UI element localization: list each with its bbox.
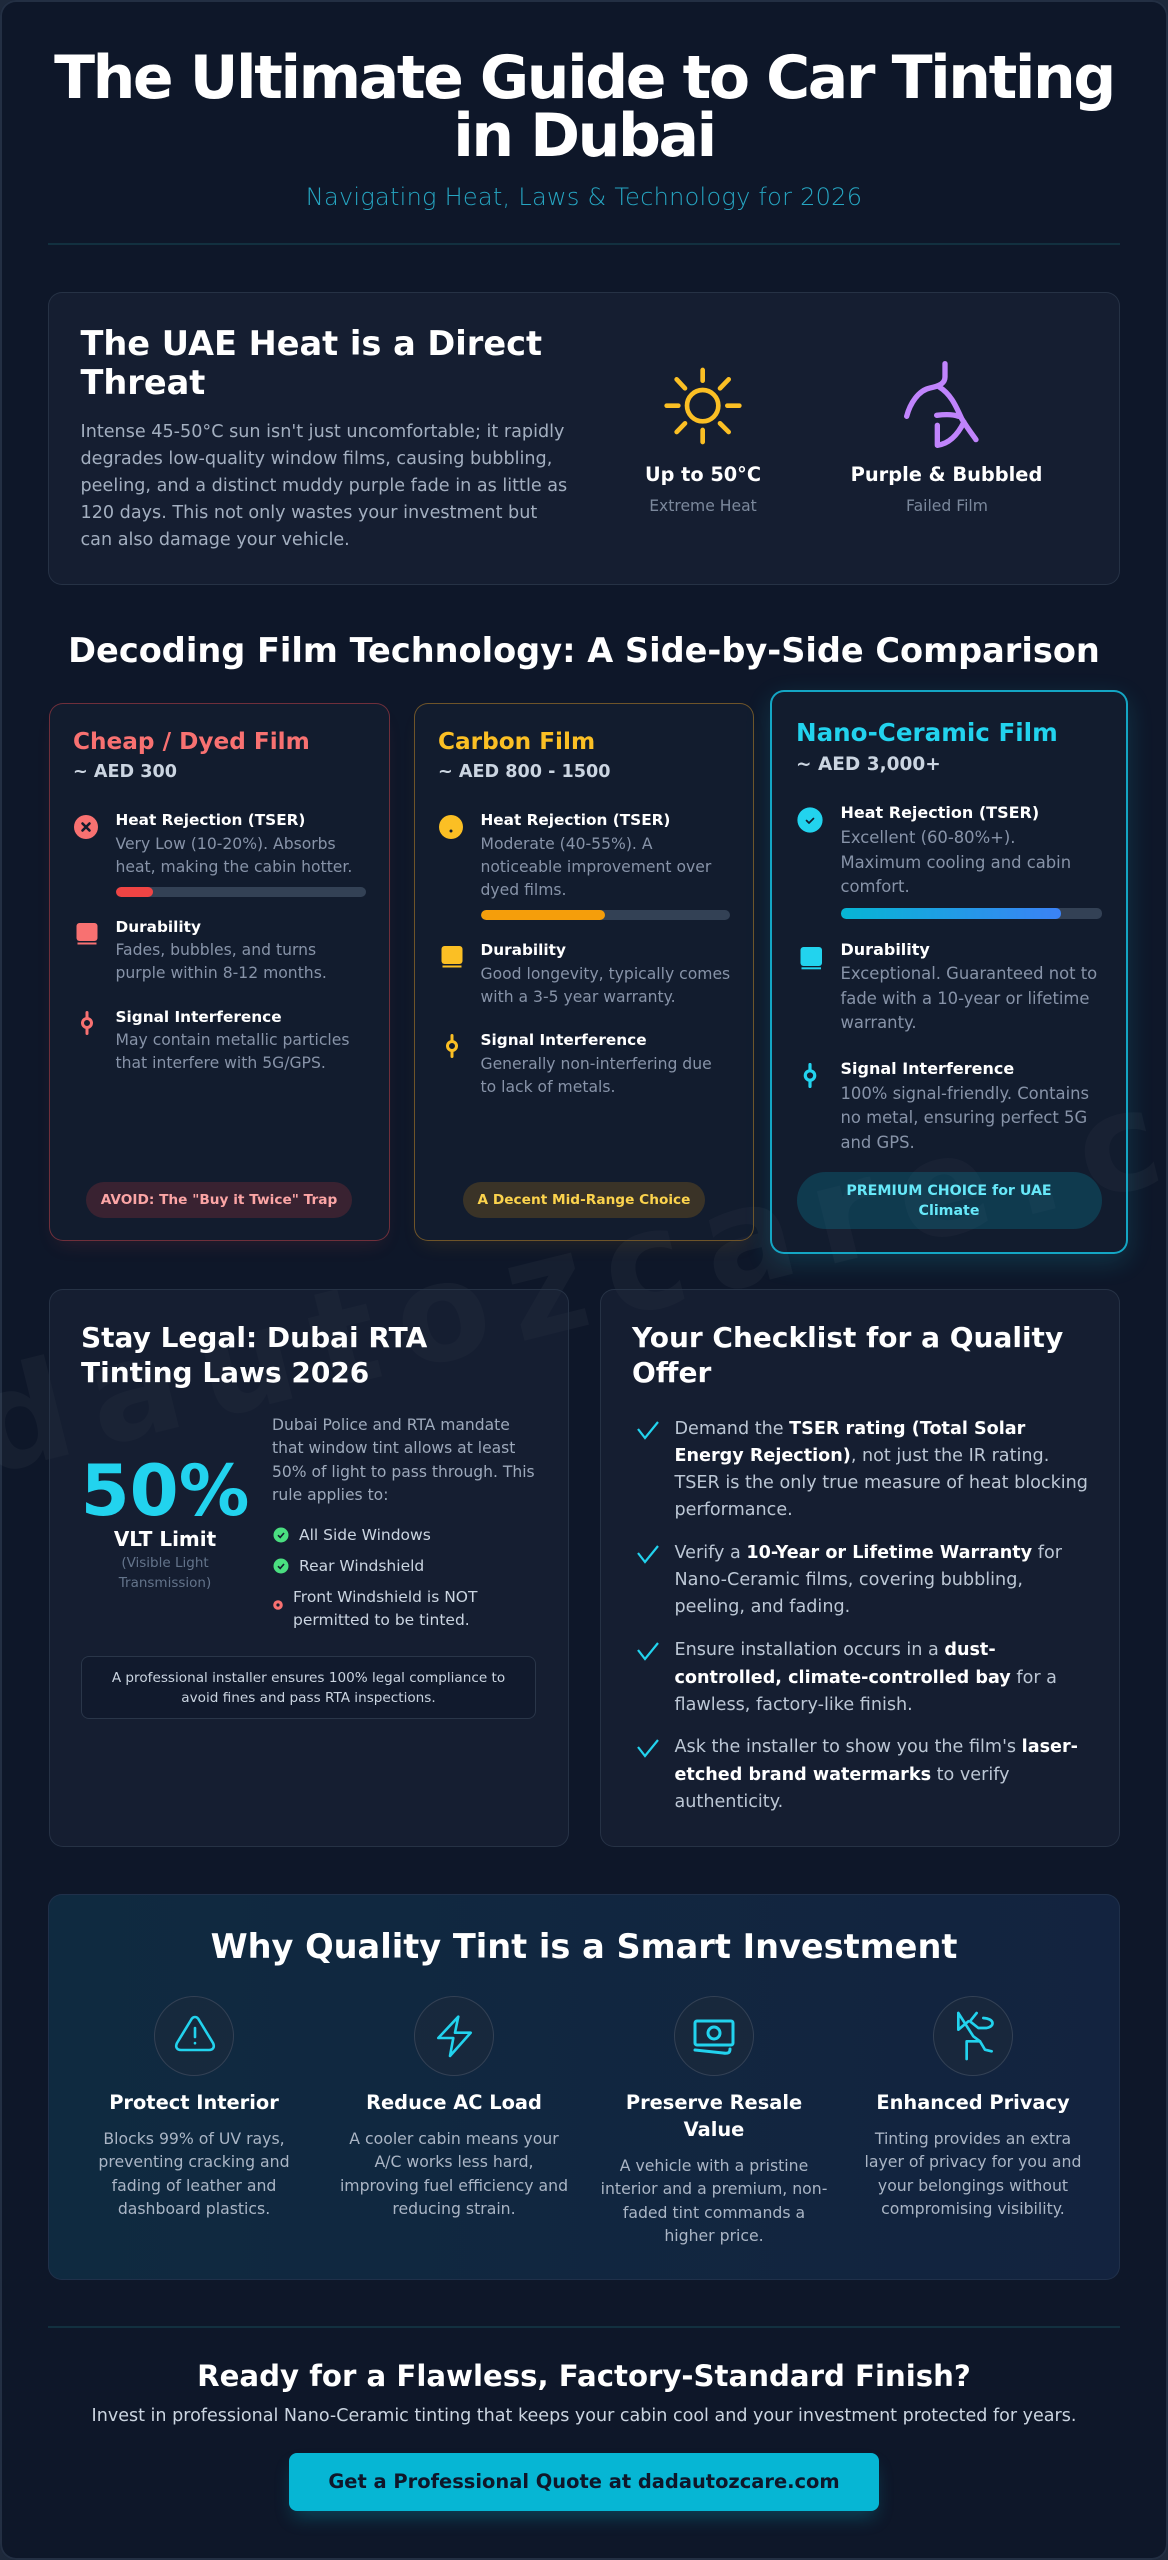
footer divider — [48, 2326, 1120, 2328]
panel: checklist — [600, 1289, 1120, 1847]
item text: durability: purple within 8-12 months. — [116, 964, 327, 982]
body text: mandate: 50% of light to pass through. This — [272, 1463, 535, 1481]
benefit text: layer of privacy for you and — [865, 2152, 1081, 2171]
checklist item 2: peeling, and fading. — [674, 1597, 850, 1617]
title: The Ultimate Guide to Car Tinting — [54, 43, 1114, 113]
item text: signal: May contain metallic particles — [116, 1031, 349, 1049]
benefit text: faded tint commands a — [623, 2203, 805, 2222]
benefit text: dashboard plastics. — [118, 2199, 270, 2218]
heading: checklist: Your Checklist for a Quality — [632, 1321, 1063, 1354]
item text: heat rejection: Maximum cooling and cabin — [840, 852, 1071, 872]
icon: warning red — [273, 1600, 283, 1610]
card price: ~ AED 3,000+ — [796, 754, 941, 774]
benefit text: A vehicle with a pristine — [620, 2156, 808, 2175]
checklist item 3 — [674, 1637, 1057, 1719]
item text: signal: no metal, ensuring perfect 5G — [840, 1108, 1087, 1127]
heading: UAE heat: Threat — [80, 362, 205, 402]
title — [54, 43, 1114, 171]
item title: signal: Signal Interference — [840, 1059, 1014, 1078]
item title: durability: Durability — [116, 918, 201, 936]
checklist item 3: flawless, factory-like finish. — [674, 1695, 913, 1715]
item text: durability — [480, 964, 730, 1006]
item text: signal: and GPS. — [840, 1133, 915, 1152]
item title: signal: Signal Interference — [116, 1008, 282, 1026]
benefit text — [865, 2127, 1081, 2220]
benefit text: improving fuel efficiency and — [340, 2176, 568, 2195]
benefit text: fading of leather and — [112, 2176, 276, 2195]
item text: signal: to lack of metals. — [480, 1078, 615, 1096]
icon: bolt — [414, 1996, 494, 2076]
icon: durability — [76, 923, 98, 944]
heading: legal: Stay Legal: Dubai RTA — [81, 1321, 427, 1354]
note box: installer: avoid fines and pass RTA inspections. — [181, 1690, 436, 1706]
body text: UAE heat: degrades low-quality window films, causing bubbling, — [80, 449, 552, 469]
body text: UAE heat: 120 days. This not only wastes your investment but — [80, 503, 537, 523]
icon: durability — [800, 947, 822, 970]
benefit text: Blocks 99% of UV rays, — [103, 2129, 285, 2148]
stat sublabel: extreme heat: Extreme Heat — [649, 497, 757, 515]
item title: durability: Durability — [480, 941, 566, 959]
benefit title — [626, 2088, 802, 2143]
section heading: comparison: Decoding Film Technology: A Side-by-Side Comparison — [68, 631, 1100, 670]
progress bar: 85 percent — [840, 908, 1102, 918]
checklist item 4: authenticity. — [674, 1792, 783, 1812]
card price: ~ AED 800 - 1500 — [438, 762, 610, 782]
badge: premium: Climate — [919, 1203, 979, 1219]
benefit text: interior and a premium, non- — [601, 2179, 827, 2198]
checklist item 2: Verify a 10-Year or Lifetime Warranty for — [674, 1543, 1062, 1563]
icon: check green — [274, 1528, 288, 1542]
body text: UAE heat: can also damage your vehicle. — [80, 530, 350, 550]
panel: nano-ceramic film — [770, 690, 1128, 1254]
heading: UAE heat: The UAE Heat is a Direct — [80, 324, 542, 363]
badge: mid range: A Decent Mid-Range Choice — [478, 1192, 690, 1208]
benefit: protect interior — [64, 1996, 324, 2226]
icon: signal — [446, 1034, 458, 1058]
progress bar: 15 percent — [116, 887, 366, 897]
item text: heat rejection: Excellent (60-80%+). — [840, 828, 1016, 847]
checklist item 1: Demand the TSER rating (Total Solar — [674, 1418, 1025, 1438]
stat sublabel: failed film: Failed Film — [906, 497, 988, 515]
card title: Cheap / Dyed Film — [73, 728, 310, 755]
progress bar: 50 percent — [480, 910, 730, 920]
subtitle: Navigating Heat, Laws & Technology for 2026 — [306, 183, 862, 211]
icon: privacy — [933, 1996, 1013, 2076]
checklist item 1: Energy Rejection), not just the IR rating. — [674, 1446, 1049, 1466]
item text: durability — [116, 941, 327, 982]
item text: signal: Generally non-interfering due — [480, 1054, 712, 1072]
body text: UAE heat: Intense 45-50°C sun isn't just uncomfortable; it rapidly — [80, 422, 564, 442]
heading: legal — [81, 1321, 428, 1388]
figure: VLT limit — [81, 1450, 249, 1591]
item text: durability: Good longevity, typically comes — [480, 964, 730, 982]
title: in Dubai — [453, 101, 715, 171]
benefit text: A/C works less hard, — [374, 2152, 534, 2171]
item text: durability: fade with a 10-year or lifetime — [840, 989, 1089, 1008]
icon: signal — [804, 1063, 816, 1088]
list item: side windows: All Side Windows — [299, 1526, 431, 1544]
benefit text — [601, 2154, 827, 2247]
benefit text: preventing cracking and — [98, 2152, 290, 2171]
privacy glyph — [950, 2008, 1003, 2063]
icon: heat check — [797, 807, 823, 833]
item text: durability: with a 3-5 year warranty. — [480, 988, 676, 1006]
stat label: purple and bubbled: Purple & Bubbled — [851, 463, 1042, 486]
checklist item 4 — [674, 1734, 1078, 1816]
checklist item 3: controlled, climate-controlled bay for a — [674, 1668, 1057, 1688]
benefit: preserve resale value — [584, 1996, 844, 2266]
benefit text — [98, 2127, 290, 2220]
bolt glyph — [434, 2014, 474, 2058]
note box: installer — [81, 1656, 536, 1719]
item text: durability: Fades, bubbles, and turns — [116, 941, 316, 959]
label: VLT limit: VLT Limit — [114, 1527, 216, 1551]
item title: durability: Durability — [840, 940, 930, 958]
stat: failed film — [851, 361, 1042, 515]
badge: premium — [796, 1172, 1102, 1229]
checklist item 4: etched brand watermarks to verify — [674, 1765, 1010, 1785]
heading: checklist — [632, 1321, 1063, 1388]
icon: signal — [81, 1011, 93, 1035]
icon: money — [674, 1996, 754, 2076]
benefit: reduce AC load — [324, 1996, 584, 2226]
checklist item 1: TSER is the only true measure of heat blocking — [674, 1473, 1088, 1493]
item text: heat rejection: heat, making the cabin hotter. — [116, 858, 352, 876]
icon: heat x — [74, 815, 98, 839]
list: allowed windows — [273, 1526, 478, 1629]
item text: durability: Exceptional. Guaranteed not to — [840, 964, 1097, 983]
body text: mandate: rule applies to: — [272, 1486, 388, 1504]
body text: mandate: Dubai Police and RTA mandate — [272, 1416, 510, 1434]
CTA button: Get a Professional Quote at dadautozcare.com — [328, 2470, 840, 2493]
benefit text: your belongings without — [878, 2176, 1068, 2195]
item title: heat rejection: Heat Rejection (TSER) — [480, 811, 670, 829]
checklist item 3: Ensure installation occurs in a dust- — [674, 1640, 996, 1660]
card price: ~ AED 300 — [73, 762, 177, 782]
header divider — [48, 243, 1120, 245]
benefit: enhanced privacy — [844, 1996, 1104, 2226]
checklist item 2 — [674, 1543, 1062, 1617]
item text: heat rejection: Moderate (40-55%). A — [480, 834, 652, 852]
icon: check green — [274, 1558, 288, 1574]
badge: mid range — [463, 1182, 705, 1218]
warning glyph — [174, 2014, 216, 2054]
benefit title: Enhanced Privacy — [876, 2090, 1070, 2114]
body text: mandate — [272, 1416, 535, 1504]
note: visible light transmission — [118, 1555, 211, 1591]
icon: check — [636, 1738, 660, 1760]
benefit text: A cooler cabin means your — [349, 2129, 559, 2148]
checklist item 1 — [674, 1418, 1088, 1520]
body text: UAE heat: peeling, and a distinct muddy purple fade in as little as — [80, 476, 567, 496]
icon: check — [637, 1545, 659, 1564]
item text: heat rejection: Very Low (10-20%). Absorbs — [116, 834, 336, 852]
item text: durability — [840, 964, 1097, 1032]
money glyph — [692, 2019, 736, 2059]
icon: check — [637, 1642, 659, 1661]
item text: heat rejection — [116, 834, 352, 876]
list item: rear windshield: Rear Windshield — [299, 1557, 424, 1575]
checklist item 1: performance. — [674, 1500, 793, 1520]
item text: signal — [840, 1084, 1089, 1152]
number: 50 percent: 50% — [81, 1450, 249, 1532]
card title: Nano-Ceramic Film — [796, 718, 1058, 747]
benefit title: Value — [684, 2118, 744, 2141]
item text: signal — [480, 1054, 712, 1096]
body text: mandate: that window tint allows at least — [272, 1439, 515, 1457]
icon: durability — [442, 946, 462, 968]
icon: warning — [154, 1996, 234, 2076]
heading: investment: Why Quality Tint is a Smart Investment — [211, 1926, 957, 1966]
benefit title: Preserve Resale — [626, 2090, 802, 2114]
stat: extreme heat — [645, 368, 761, 515]
icon: sun — [664, 368, 742, 444]
item text: heat rejection: noticeable improvement over — [480, 858, 711, 876]
heading: checklist: Offer — [632, 1356, 711, 1388]
item title: heat rejection: Heat Rejection (TSER) — [116, 811, 305, 829]
icon: purple crack — [904, 361, 979, 448]
item title: signal: Signal Interference — [480, 1031, 647, 1049]
benefit text: Tinting provides an extra — [875, 2129, 1071, 2148]
checklist item 4: Ask the installer to show you the film's laser- — [674, 1737, 1078, 1757]
benefit text: compromising visibility. — [881, 2199, 1065, 2218]
panel: UAE heat threat — [48, 292, 1120, 585]
body text: UAE heat — [80, 422, 567, 550]
heading: legal: Tinting Laws 2026 — [81, 1356, 369, 1388]
badge: premium: PREMIUM CHOICE for UAE — [846, 1182, 1052, 1198]
list item: front windshield: Front Windshield is NOT — [293, 1588, 477, 1606]
checklist item 2: Nano-Ceramic films, covering bubbling, — [674, 1570, 1023, 1590]
badge: avoid — [86, 1182, 352, 1218]
list item: front windshield — [293, 1588, 478, 1629]
panel: legal — [49, 1289, 569, 1847]
item text: signal: that interfere with 5G/GPS. — [116, 1054, 326, 1072]
item text: heat rejection — [480, 834, 712, 899]
item text: signal — [116, 1031, 349, 1072]
panel: carbon film — [414, 703, 754, 1241]
benefit text — [340, 2127, 568, 2220]
item title: heat rejection: Heat Rejection (TSER) — [840, 802, 1039, 822]
benefit title: Reduce AC Load — [366, 2090, 542, 2114]
note box: installer: A professional installer ensures 100% legal compliance to — [112, 1670, 505, 1686]
icon: check — [637, 1421, 659, 1440]
CTA text: Invest in professional Nano-Ceramic tinting that keeps your cabin cool and your investment protected for years. — [92, 2406, 1076, 2426]
panel: investment — [48, 1894, 1120, 2280]
panel: cheap dyed film — [49, 703, 390, 1241]
item text: durability: warranty. — [840, 1013, 917, 1032]
list item: front windshield: permitted to be tinted. — [293, 1611, 470, 1629]
CTA heading: Ready for a Flawless, Factory-Standard Finish? — [197, 2359, 971, 2393]
benefit title: Protect Interior — [109, 2090, 279, 2114]
icon: heat dot — [439, 815, 463, 839]
item text: signal: 100% signal-friendly. Contains — [840, 1084, 1089, 1102]
item text: heat rejection — [840, 828, 1071, 896]
badge: avoid: AVOID: The "Buy it Twice" Trap — [101, 1192, 337, 1208]
benefit text: reducing strain. — [392, 2199, 516, 2218]
note: visible light transmission: Transmission) — [119, 1575, 211, 1591]
item text: heat rejection: dyed films. — [480, 881, 567, 899]
benefit text: higher price. — [664, 2226, 764, 2245]
card title: Carbon Film — [438, 728, 595, 755]
stat label: up to 50: Up to 50°C — [645, 463, 761, 486]
note: visible light transmission: (Visible Light — [121, 1555, 209, 1571]
item text: heat rejection: comfort. — [840, 877, 910, 896]
heading: UAE heat — [80, 324, 542, 402]
CTA button — [289, 2453, 879, 2511]
